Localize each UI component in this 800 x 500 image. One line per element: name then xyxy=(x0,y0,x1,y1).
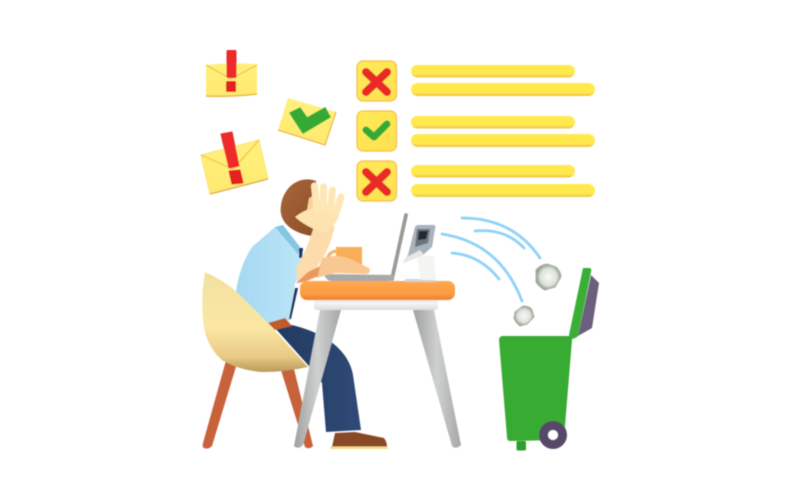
checklist row 3 xyxy=(357,161,595,201)
desk leg left xyxy=(294,310,341,448)
crumpled paper, small xyxy=(514,306,534,326)
motion arcs xyxy=(442,218,540,301)
envelope with exclamation, top xyxy=(206,50,257,96)
webcam on stand xyxy=(403,225,436,282)
checklist row 2 xyxy=(357,111,595,151)
envelope with exclamation, bottom xyxy=(201,132,268,194)
man: arm and hand on face xyxy=(295,186,341,283)
crumpled paper, large xyxy=(536,264,561,290)
envelope with check mark xyxy=(278,98,336,145)
laptop xyxy=(324,215,406,281)
bin lid xyxy=(578,275,599,336)
man: hand on keyboard xyxy=(316,256,370,278)
checklist row 1 xyxy=(357,61,595,101)
green trash bin xyxy=(499,268,599,450)
bin body xyxy=(499,336,572,441)
coffee mug xyxy=(327,247,362,265)
chair seat xyxy=(202,272,308,372)
man: trousers and shoe xyxy=(275,325,388,449)
bin foot xyxy=(516,441,526,450)
desk xyxy=(294,281,461,448)
desk leg right xyxy=(413,310,461,448)
bin wheel xyxy=(544,426,562,444)
man: head and hair xyxy=(281,179,322,236)
man: torso and shirt xyxy=(235,225,307,330)
chair legs xyxy=(203,357,313,449)
